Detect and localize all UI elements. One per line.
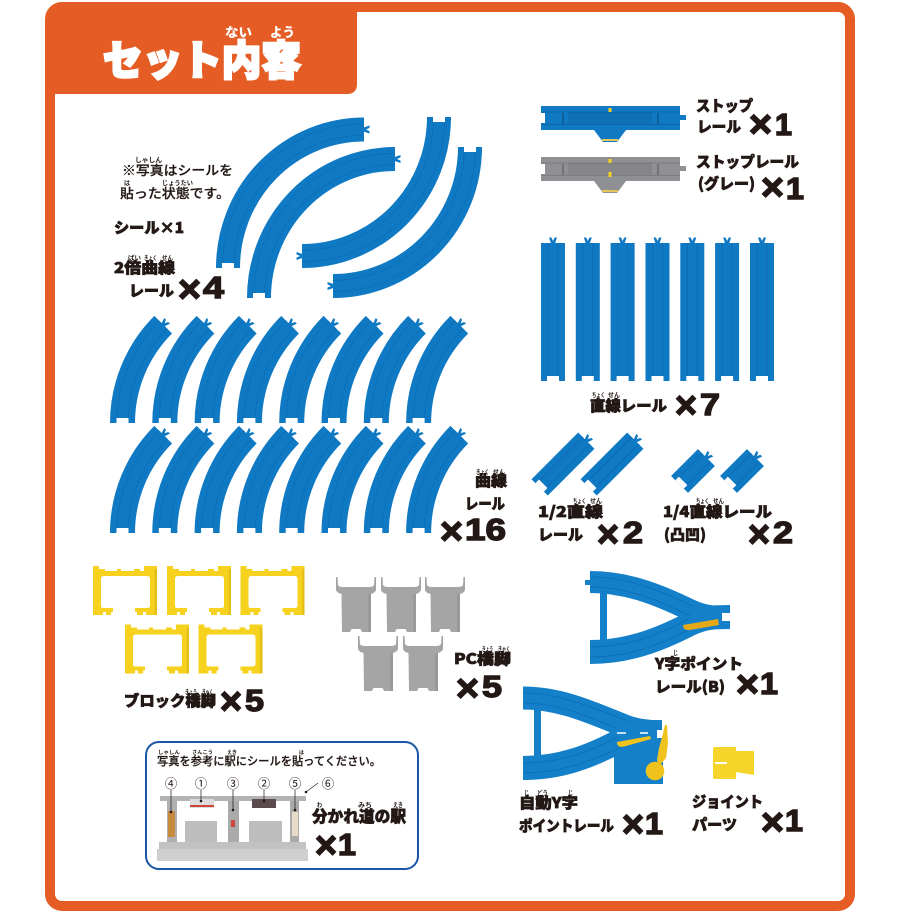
number callouts: ③ xyxy=(227,773,240,792)
label: stop rail gray x1: 1 xyxy=(786,171,804,206)
label: stop rail gray x1: ストップレール xyxy=(696,151,799,172)
instruction text: えき xyxy=(227,749,237,756)
label: auto Y point rail x1: × xyxy=(622,804,644,846)
label: block pier x5: 5 xyxy=(245,683,264,718)
label: curve rail x16: レール xyxy=(465,493,505,514)
label: double curve rail x4: きょく xyxy=(144,252,157,262)
label: Y point rail B x1: × xyxy=(736,664,759,706)
label: station x1: わ xyxy=(317,799,322,809)
title: ない xyxy=(225,22,252,41)
label: PC pier x5: きゃく xyxy=(498,643,510,653)
label: curve rail x16 xyxy=(440,466,507,553)
label: double curve rail x4: せん xyxy=(162,252,173,262)
PC piers x5 xyxy=(336,577,465,691)
label: station x1: みち xyxy=(358,799,372,809)
label: PC pier x5: × xyxy=(456,668,479,710)
double curve rails xyxy=(222,117,476,298)
label: half rail x2: せん xyxy=(590,495,602,505)
lever xyxy=(683,619,719,630)
label: straight rail x7 xyxy=(590,385,720,427)
label: stop rail gray x1: × xyxy=(761,167,784,209)
label: auto Y point rail x1 xyxy=(519,787,663,846)
label: curve rail x16: きょく xyxy=(476,466,489,476)
note: photo with stickers: じょうたい xyxy=(162,177,193,187)
label: stop rail gray x1 xyxy=(696,151,804,209)
label: stop rail x1: レール xyxy=(697,116,741,137)
note: photo with stickers: ※写真はシールを xyxy=(122,160,233,179)
label: Y point rail B x1 xyxy=(654,647,778,706)
curve rails x16 xyxy=(116,318,466,533)
note: photo with stickers: しゃしん xyxy=(135,154,163,164)
label: double curve rail x4: 2倍曲線 xyxy=(114,257,175,278)
half straight rails x2 xyxy=(532,429,647,495)
label: half rail x2 xyxy=(538,495,643,556)
label: quarter rail x2: せん xyxy=(713,495,724,505)
label: half rail x2: 2 xyxy=(623,515,643,550)
instruction text: 写真を参考に駅にシールを貼ってください。 xyxy=(157,753,381,769)
label: half rail x2: 1/2直線 xyxy=(538,501,603,522)
label: quarter rail x2: ちょく xyxy=(696,495,709,505)
label: block pier x5: きゃく xyxy=(202,686,213,696)
note: photo with stickers xyxy=(120,154,233,202)
label: block pier x5: きょう xyxy=(185,686,197,696)
label: half rail x2: × xyxy=(597,514,619,556)
instruction text: さんこう xyxy=(192,749,213,756)
label: straight rail x7: 7 xyxy=(700,387,720,422)
label: stop rail x1: ストップ xyxy=(696,95,753,116)
label: curve rail x16: 曲線 xyxy=(475,470,507,491)
label: auto Y point rail x1: 1 xyxy=(645,806,663,841)
label: joint parts x1: パーツ xyxy=(692,814,737,835)
label: joint parts x1: × xyxy=(761,802,784,844)
label: auto Y point rail x1: ポイントレール xyxy=(519,815,614,836)
label: Y point rail B x1: 1 xyxy=(760,666,778,701)
label: quarter rail x2: (凸凹) xyxy=(664,524,706,545)
number callouts: ④ xyxy=(165,773,178,792)
label: joint parts x1: ジョイント xyxy=(692,791,763,812)
label: stop rail x1 xyxy=(696,95,792,146)
label: quarter rail x2: 1/4直線レール xyxy=(663,501,772,522)
quarter straight rails x2 xyxy=(671,445,768,493)
note: photo with stickers: 貼った状態です。 xyxy=(120,183,230,202)
number callouts xyxy=(165,773,335,813)
label: double curve rail x4: × xyxy=(178,269,201,311)
number callouts: ⑤ xyxy=(289,773,302,792)
number callouts: ② xyxy=(258,773,271,792)
label: station x1: えき xyxy=(393,799,403,809)
label: curve rail x16: せん xyxy=(493,466,505,476)
label: curve rail x16: 16 xyxy=(465,512,506,547)
label: block pier x5 xyxy=(124,681,264,723)
yellow arm xyxy=(657,725,668,766)
instruction text: しゃしん xyxy=(158,749,180,756)
label: quarter rail x2: 2 xyxy=(773,515,793,550)
label: Y point rail B x1: レール(B) xyxy=(655,676,725,697)
label: quarter rail x2: × xyxy=(748,514,770,556)
panel: station xyxy=(146,742,418,869)
label: half rail x2: ちょく xyxy=(573,495,586,505)
number callouts: ① xyxy=(195,773,208,792)
label: straight rail x7: × xyxy=(675,385,697,427)
label: Y point rail B x1: Y字ポイント xyxy=(654,653,743,674)
label: straight rail x7: 直線レール xyxy=(590,395,667,416)
stop rail gray xyxy=(541,157,686,193)
label: half rail x2: レール xyxy=(538,524,583,545)
label: PC pier x5: PC橋脚 xyxy=(454,648,511,669)
block piers x5 xyxy=(93,566,304,674)
label: straight rail x7: せん xyxy=(608,389,620,399)
title tab xyxy=(50,7,357,94)
label: stop rail x1: 1 xyxy=(775,107,792,142)
Y point rail B xyxy=(585,577,732,657)
label: joint parts x1: 1 xyxy=(785,803,803,838)
label: block pier x5: × xyxy=(220,681,242,723)
joint parts xyxy=(713,747,754,779)
label: curve rail x16: × xyxy=(440,511,463,553)
note: photo with stickers: は xyxy=(124,177,130,187)
label: station x1: 1 xyxy=(338,827,356,862)
stop rail blue xyxy=(541,106,686,142)
label: station x1: 分かれ道の駅 xyxy=(312,803,406,827)
label: straight rail x7: ちょく xyxy=(592,389,605,399)
label: double curve rail x4: レール xyxy=(129,280,174,301)
label: PC pier x5 xyxy=(454,643,511,710)
label: stop rail gray x1: (グレー) xyxy=(698,173,755,194)
label: quarter rail x2 xyxy=(663,495,793,556)
number callouts: ⑥ xyxy=(322,773,335,792)
label: auto Y point rail x1: 自動Y字 xyxy=(519,792,578,813)
label: station x1 xyxy=(312,799,406,867)
label: PC pier x5: きょう xyxy=(482,643,493,653)
lever xyxy=(617,736,651,747)
label: block pier x5: ブロック橋脚 xyxy=(124,690,216,711)
label: double curve rail x4 xyxy=(114,252,225,311)
label: Y point rail B x1: じ xyxy=(673,647,678,657)
straight rails x7 xyxy=(541,238,774,381)
auto Y point rail xyxy=(523,693,668,784)
label: double curve rail x4: 4 xyxy=(203,270,225,305)
instruction text: は xyxy=(299,749,304,756)
label: auto Y point rail x1: じ xyxy=(524,787,529,797)
label: sticker x1: シール×1 xyxy=(114,217,184,238)
label: station x1: × xyxy=(315,825,337,867)
title: セット内容 xyxy=(103,27,301,87)
label: joint parts x1 xyxy=(692,791,803,844)
label: double curve rail x4: ばい xyxy=(128,252,142,262)
title: よう xyxy=(270,22,295,41)
label: PC pier x5: 5 xyxy=(482,669,502,704)
station model xyxy=(157,796,308,861)
label: auto Y point rail x1: じ xyxy=(568,787,573,797)
label: auto Y point rail x1: どう xyxy=(537,787,548,797)
label: stop rail x1: × xyxy=(749,104,772,146)
